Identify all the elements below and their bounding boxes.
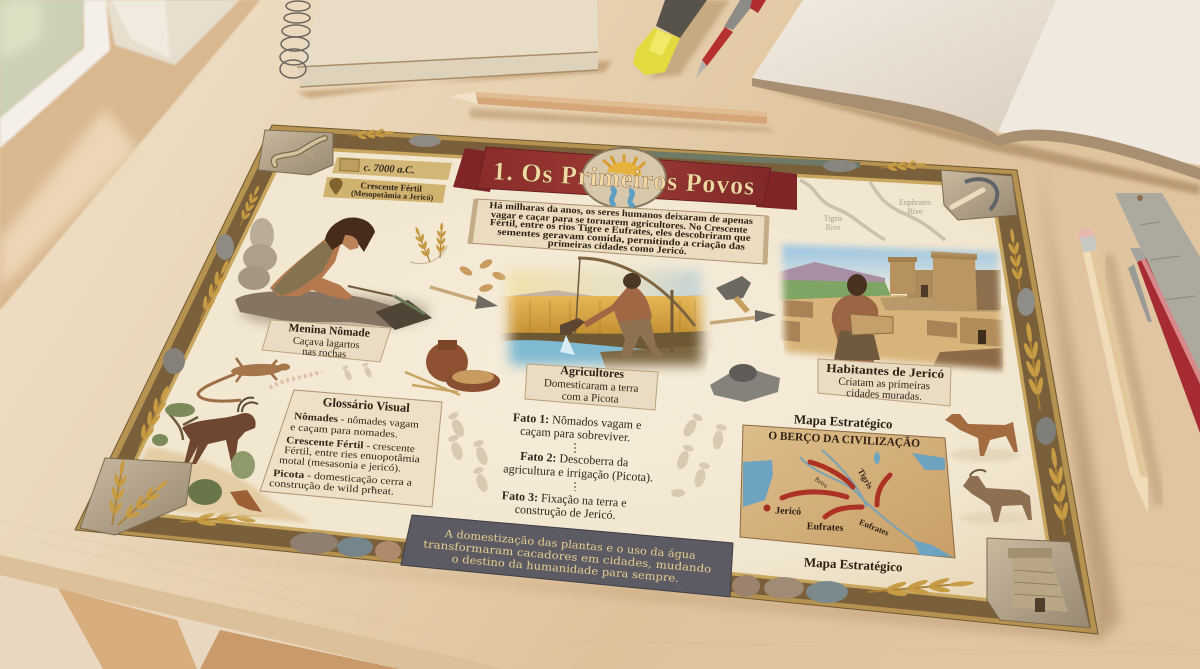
poster <box>75 125 1098 634</box>
intro scroll: sementes geravam comida, permitindo a criação das <box>497 227 746 253</box>
icon: wheat stalks and seeds <box>410 223 507 293</box>
map title bottom: Mapa Estratégico <box>804 554 903 575</box>
intro scroll: Fértil, entre os rios Tigre e Eufrates, eles descobriram que <box>490 218 751 244</box>
caption: Menina Nômade: nas rochas <box>302 346 347 361</box>
map: O Berço da Civilização: Jericó <box>775 505 801 518</box>
location tag: (Mesopotâmia a Jericó) <box>351 189 434 202</box>
caption: Agricultores: Domesticaram a terra <box>544 377 639 395</box>
border wheat bottom <box>179 506 974 600</box>
facts list: Fato 3: Fixação na terra e <box>501 488 627 510</box>
spiral notebook <box>280 0 612 98</box>
illustration: nomadic girl on rocks <box>235 217 432 330</box>
glossary panel: Fértil, entre ries enuopotâmia <box>284 445 421 466</box>
illustration: goats <box>945 414 1032 524</box>
title banner <box>453 147 797 210</box>
glossary panel: motal (mesasonia e jericó). <box>279 455 401 475</box>
intro scroll <box>468 199 767 264</box>
date tag <box>332 157 452 180</box>
paper background <box>114 149 1056 605</box>
caption: Agricultores: com a Picota <box>561 390 619 406</box>
glossary panel: Picota - domesticação cerra a <box>273 468 413 489</box>
closing stone banner: transformaram cacadores em cidades, mudando <box>423 538 712 576</box>
caption: Agricultores: Agricultores <box>560 363 625 381</box>
glossary panel: Glossário Visual <box>322 395 411 415</box>
border wheat left <box>132 184 263 453</box>
corner stone: bone and sickle <box>941 170 1017 220</box>
map: O Berço da Civilização: O BERÇO DA CIVILIZAÇÃO <box>768 428 921 450</box>
facts list: caçam para sobreviver. <box>520 424 631 444</box>
faint rivers: Rive <box>907 207 923 216</box>
closing stone banner: A domestização das plantas e o uso da água <box>443 528 696 562</box>
faint rivers <box>800 180 945 240</box>
border wheat right <box>1005 228 1073 536</box>
corner stone: tower <box>987 538 1090 628</box>
sun medallion <box>582 148 666 208</box>
corner stone: wheat <box>80 458 192 535</box>
glossary panel: construção de wild prħeat. <box>269 478 394 498</box>
map: O Berço da Civilização: Eufrates <box>807 521 844 534</box>
location tag <box>323 177 446 203</box>
border frame <box>75 125 1098 634</box>
glossary panel: e caçam para nomades. <box>290 422 398 441</box>
facts list: construção de Jericó. <box>514 502 616 522</box>
glossary panel: Crescente Fértil - crescente <box>286 435 416 455</box>
map title top: Mapa Estratégico <box>794 411 893 432</box>
red pen <box>696 0 766 78</box>
icon: clay pot and bowl <box>405 340 500 395</box>
facts list: agricultura e irrigação (Picota). <box>503 461 654 485</box>
caption: Menina Nômade: Caçava lagartos <box>292 336 360 351</box>
date tag: c. 7000 a.C. <box>363 163 415 176</box>
facts list: Fato 1: Nômados vagam e <box>513 410 642 432</box>
map: O Berço da Civilização: Retra <box>813 476 829 490</box>
illustration: Jericho walled city <box>775 235 1010 375</box>
faint rivers: Tigris <box>824 214 842 223</box>
caption: Agricultores <box>525 363 658 410</box>
faint rivers: Enphrates <box>899 198 931 207</box>
illustration: lizard <box>198 358 322 401</box>
arrow to Jericho <box>710 310 776 323</box>
border wheat top <box>350 127 926 173</box>
intro scroll: Há milharas da anos, os seres humanos deixaram de apenas <box>489 201 754 227</box>
window and floor at top left <box>0 0 260 310</box>
caption: Habitantes de Jericó: cidades muradas. <box>846 387 923 403</box>
arrow to farmer <box>430 287 498 309</box>
yellow pencil on right <box>1078 228 1160 513</box>
glossary panel: Nômades - nômades vagam <box>294 411 419 431</box>
icon: stone hammer <box>716 276 751 313</box>
corner stone: lizard <box>258 130 333 175</box>
illustration: farmer irrigating wheat <box>500 256 712 374</box>
location tag: Crescente Fértil <box>360 180 423 194</box>
border stones <box>163 135 1056 603</box>
faint rivers: Rive <box>825 223 841 232</box>
red pen on right <box>1128 248 1200 433</box>
footprints <box>341 362 727 497</box>
map: O Berço da Civilização: Tigris <box>856 467 876 491</box>
intro scroll: vagar e caçar para se tornarem agricultores. No Crescente <box>491 210 748 236</box>
caption: Habitantes de Jericó: Habitantes de Jericó <box>826 361 944 381</box>
caption: Menina Nômade <box>262 320 391 362</box>
closing stone banner <box>401 515 733 597</box>
caption: Menina Nômade: Menina Nômade <box>288 322 370 340</box>
intro scroll: primeiras cidades como Jericó. <box>547 239 687 257</box>
title text: 1. Os Primeiros Povos <box>492 156 755 201</box>
open book <box>752 0 1200 195</box>
poster shadow <box>90 170 1120 640</box>
map: O Berço da Civilização: Eufrates <box>858 517 891 538</box>
facts list <box>501 410 654 522</box>
map: O Berço da Civilização <box>740 425 955 558</box>
caption: Habitantes de Jericó <box>818 359 951 406</box>
icon: grinding stone <box>710 364 780 402</box>
facts list: Fato 2: Descoberra da <box>520 449 629 469</box>
ruler <box>1115 193 1200 377</box>
table front edge and legs <box>0 555 500 669</box>
closing stone banner: o destino da humanidade para sempre. <box>451 553 679 585</box>
caption: Habitantes de Jericó: Criatam as primeiras <box>838 376 930 392</box>
wooden pencil <box>450 92 775 132</box>
illustration: ibex on terrain with tree <box>125 398 310 523</box>
highlighter <box>633 0 730 78</box>
glossary panel <box>260 390 442 507</box>
